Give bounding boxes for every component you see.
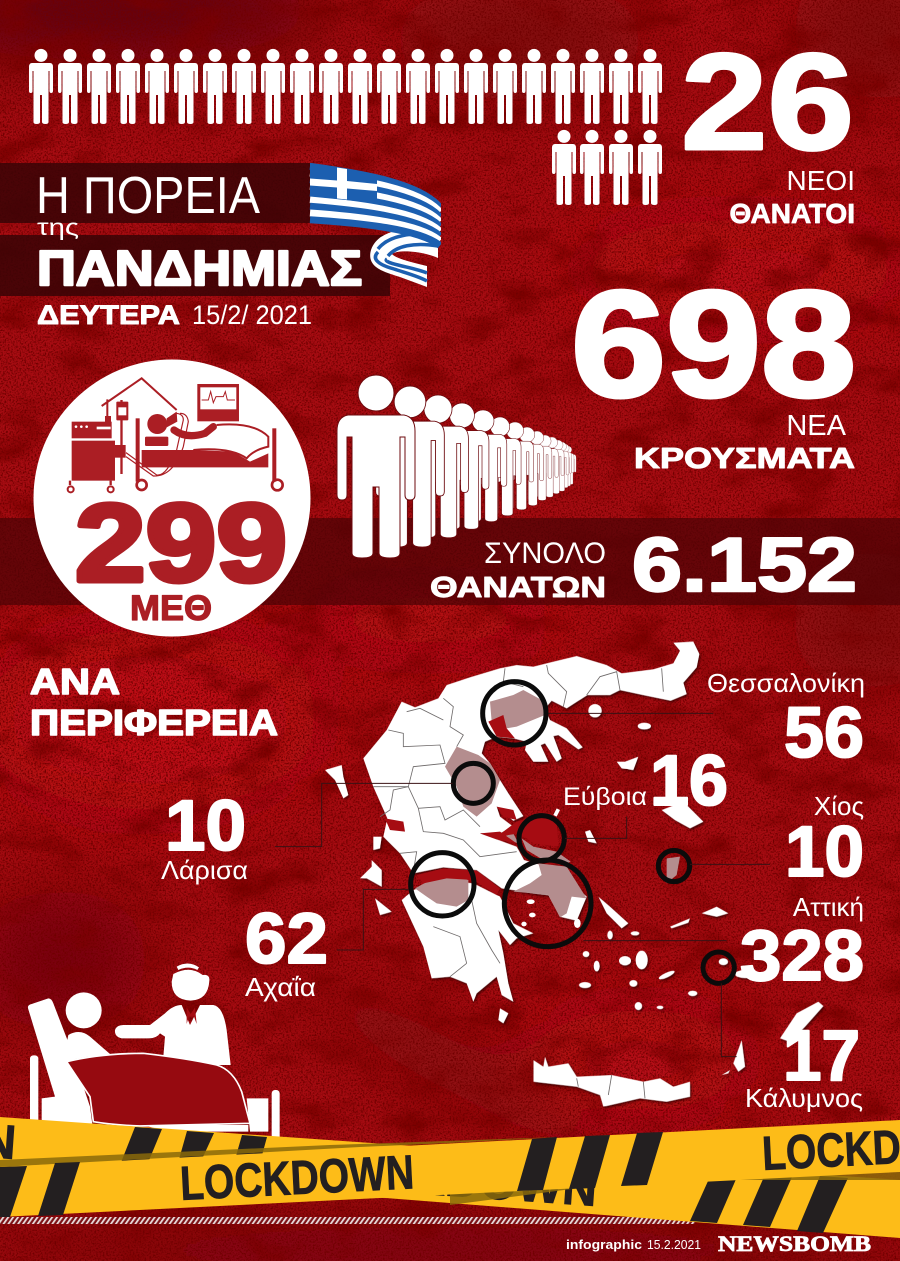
heading: by region: ΑΝΑ [30,661,120,702]
tape word left: LOCKDOWN [179,1146,415,1211]
stat: 698 new cases [571,259,856,475]
number: 299 ICU: 299 [75,482,287,605]
dark horizontal band behind ICU and total deaths [0,518,900,605]
label: Evia 16: 16 [650,742,728,821]
label: Kalymnos 17: Κάλυμνος [745,1083,863,1113]
map of Greece with highlighted regions [275,642,823,1107]
footer credit [566,1231,871,1256]
label: Larissa 10: Λάρισα [161,855,248,885]
label: Attica 328: 328 [740,917,864,996]
stat: 698 new cases: ΝΕΑ [786,410,847,442]
footer credit: infographic [566,1237,642,1252]
title block: ΔΕΥΤΕΡΑ [37,300,180,330]
label: Evia 16: Εύβοια [563,783,647,811]
label: Thessaloniki 56 [707,668,865,773]
map land [325,642,823,1107]
stat: total deaths 6.152: ΣΥΝΟΛΟ [484,537,606,570]
icon row: 26 new deaths as people [29,49,662,205]
tape shadows [0,1137,900,1205]
title block: της [37,214,79,240]
heading: by region [30,661,278,743]
stat: 26 new deaths: ΘΑΝΑΤΟΙ [729,198,855,229]
map: leader lines [275,713,770,1057]
barrier tape: front band with LOCKDOWN [0,1116,900,1217]
label: Kalymnos 17 [745,1017,863,1113]
title block [0,163,390,330]
title block: ΠΑΝΔΗΜΙΑΣ [37,242,362,296]
label: Thessaloniki 56: 56 [784,694,864,773]
label: Kalymnos 17: 17 [783,1017,860,1096]
stat: 26 new deaths: 26 [681,26,854,179]
label: Thessaloniki 56: Θεσσαλονίκη [707,668,865,698]
stat: total deaths 6.152 [430,523,857,608]
map: white shards and small islands [517,717,581,928]
stat: 698 new cases: 698 [571,259,856,428]
icon: Greek flag ribbon [310,163,440,287]
stat: 698 new cases: ΚΡΟΥΣΜΑΤΑ [634,443,855,475]
footer credit: NEWSBOMB [718,1231,871,1256]
map: region borders [373,665,663,1098]
icon: long queue of people [337,375,576,558]
label: Achaia 62: Αχαΐα [245,972,316,1002]
stat: total deaths 6.152: ΘΑΝΑΤΩΝ [430,572,606,604]
stat: 26 new deaths [681,26,855,229]
label: Achaia 62: 62 [245,900,328,979]
label: Attica 328: Αττική [793,892,864,922]
icon: doctor and patient in bed [28,963,280,1140]
hatched strip [0,1217,695,1224]
map: highlighted regions [415,690,680,917]
title block: Η ΠΟΡΕΙΑ [36,167,260,225]
tape word: partly hidden LOCKDOWN [0,1097,599,1217]
label: Larissa 10: 10 [165,787,246,866]
label: Evia 16 [563,742,728,821]
heading: by region: ΠΕΡΙΦΕΡΕΙΑ [30,702,278,743]
footer credit: 15.2.2021 [647,1237,701,1252]
stat: total deaths 6.152: 6.152 [632,523,857,608]
icon: ICU bed and machines [68,378,283,492]
tape word: partly hidden LOCKDOWN: LOCKDOWN [308,1144,599,1217]
barrier tape: rear band with LOCKDOWN [0,1097,900,1238]
tape stripes [118,1127,848,1233]
tape stripes [0,1132,663,1217]
stat: 26 new deaths: ΝΕΟΙ [787,165,855,196]
label: Chios 10: 10 [785,813,864,892]
map: black region circles [411,682,734,983]
title block: 15/2/ 2021 [192,300,312,330]
label: ICU: ΜΕΘ [130,589,212,628]
panel: ICU circle with 299 [34,360,310,636]
label: Chios 10: Χίος [814,791,864,821]
map: gulfs and sea cuts [385,715,558,895]
